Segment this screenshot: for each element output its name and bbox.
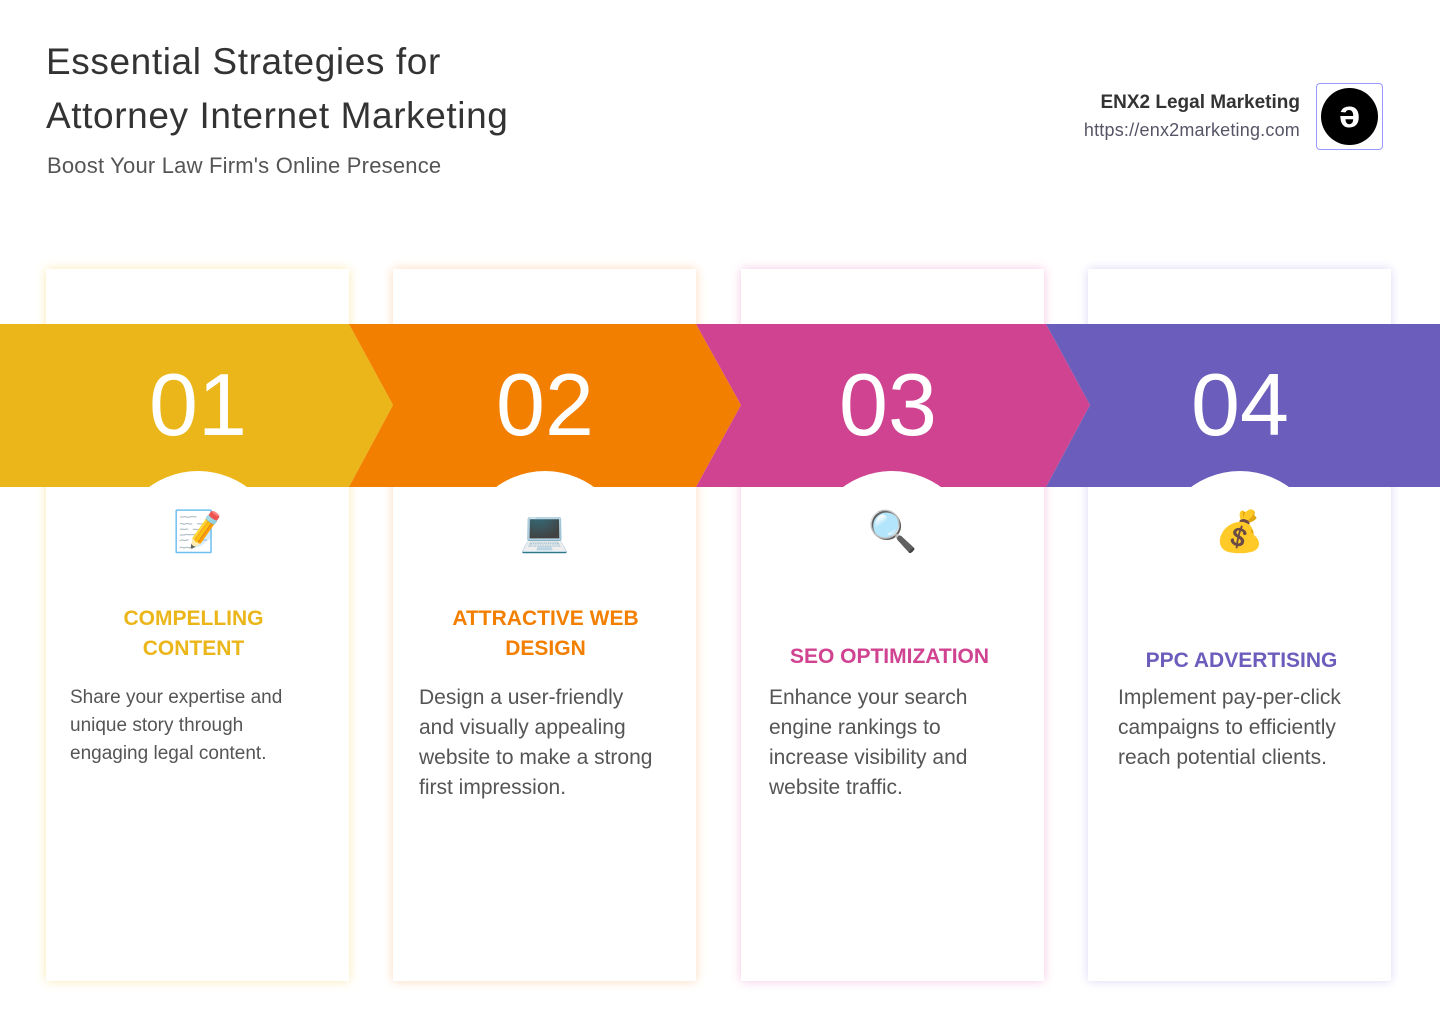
logo: ə	[1339, 94, 1360, 136]
chevron band: 02	[496, 355, 594, 454]
logo	[1316, 83, 1383, 150]
chevron band: 04	[1191, 355, 1289, 454]
card 4	[1088, 269, 1391, 981]
brand	[1084, 83, 1383, 150]
texts: unique story through	[70, 715, 243, 736]
text: and visually appealing	[419, 716, 626, 739]
text: reach potential clients.	[1118, 746, 1327, 769]
chevron band: 03	[839, 355, 937, 454]
text: Enhance your search	[769, 686, 967, 709]
headings	[124, 607, 264, 660]
card 1	[46, 269, 349, 981]
chevron band: 01	[149, 355, 247, 454]
text: 💰	[1215, 510, 1264, 554]
texts: engaging legal content.	[70, 743, 266, 764]
text: website traffic.	[769, 776, 903, 799]
icons: 📝	[173, 510, 222, 554]
text: SEO OPTIMIZATION	[790, 645, 989, 668]
texts	[70, 687, 282, 764]
card 2	[393, 269, 696, 981]
title	[46, 41, 508, 136]
text: Implement pay-per-click	[1118, 686, 1341, 709]
headings: COMPELLING	[124, 607, 264, 630]
text: website to make a strong	[419, 746, 652, 769]
title: Attorney Internet Marketing	[46, 95, 508, 136]
card 3	[741, 269, 1044, 981]
brand: https://enx2marketing.com	[1084, 120, 1300, 140]
text: Design a user-friendly	[419, 686, 623, 709]
brand: ENX2 Legal Marketing	[1100, 92, 1300, 113]
text: engine rankings to	[769, 716, 941, 739]
subtitle: Boost Your Law Firm's Online Presence	[47, 153, 441, 178]
text: PPC ADVERTISING	[1146, 649, 1337, 672]
texts: Share your expertise and	[70, 687, 282, 708]
text: first impression.	[419, 776, 566, 799]
headings: CONTENT	[143, 637, 244, 660]
text: campaigns to efficiently	[1118, 716, 1336, 739]
text: increase visibility and	[769, 746, 967, 769]
title: Essential Strategies for	[46, 41, 441, 82]
text: ATTRACTIVE WEB	[452, 607, 639, 630]
text: 🔍	[868, 510, 917, 554]
text: 💻	[520, 510, 569, 554]
text: DESIGN	[505, 637, 586, 660]
